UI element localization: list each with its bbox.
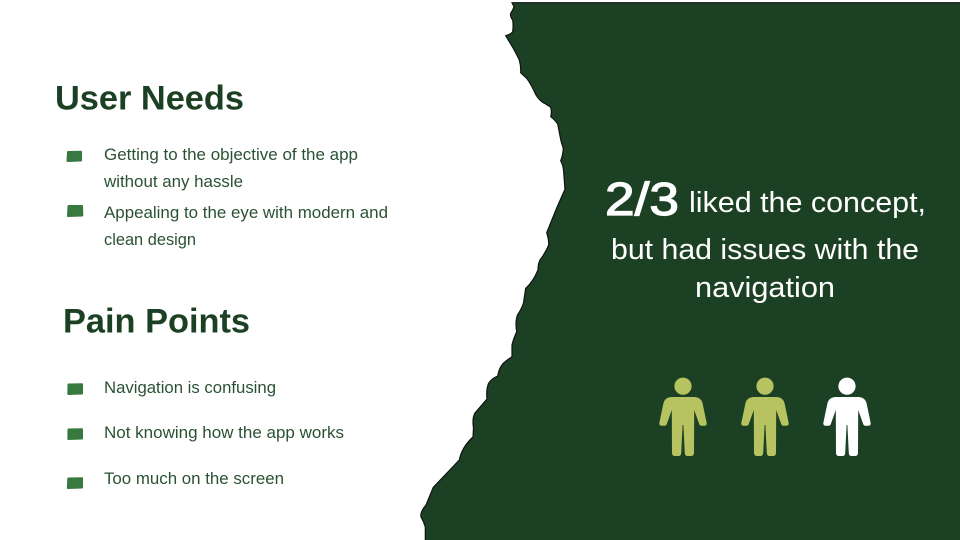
icon: person 2 xyxy=(741,378,789,456)
icon: person 1 xyxy=(659,378,707,456)
icon group: three people xyxy=(659,378,871,456)
heading: Pain Points: Pain Points xyxy=(63,302,250,340)
bullet 2 xyxy=(68,429,82,439)
bullet 1 xyxy=(68,152,81,161)
bullet 3 xyxy=(68,478,82,488)
text: line 2: but had issues with the xyxy=(611,234,919,266)
text: pain 2: Not knowing how the app works xyxy=(104,423,344,442)
heading: User Needs: User Needs xyxy=(55,80,244,118)
text: need 2: Appealing to the eye with modern and xyxy=(104,203,388,222)
callout: statistic text xyxy=(605,173,926,304)
list: pain points xyxy=(68,378,344,488)
icon: person 3 xyxy=(823,378,871,456)
text: pain 1: Navigation is confusing xyxy=(104,378,276,397)
bullet 1 xyxy=(68,384,82,394)
panel: torn dark green background xyxy=(421,3,960,540)
text: pain 3: Too much on the screen xyxy=(104,469,284,488)
bullet 2 xyxy=(68,206,82,216)
text: need 1: Getting to the objective of the app xyxy=(104,145,358,164)
text: line 1: liked the concept, xyxy=(689,187,926,219)
text: need 2 continued: clean design xyxy=(104,230,196,249)
text: line 3: navigation xyxy=(695,272,835,304)
stat: 2/3: 2/3 xyxy=(605,173,679,225)
list: user needs xyxy=(68,145,388,249)
text: need 1 continued: without any hassle xyxy=(103,172,243,191)
